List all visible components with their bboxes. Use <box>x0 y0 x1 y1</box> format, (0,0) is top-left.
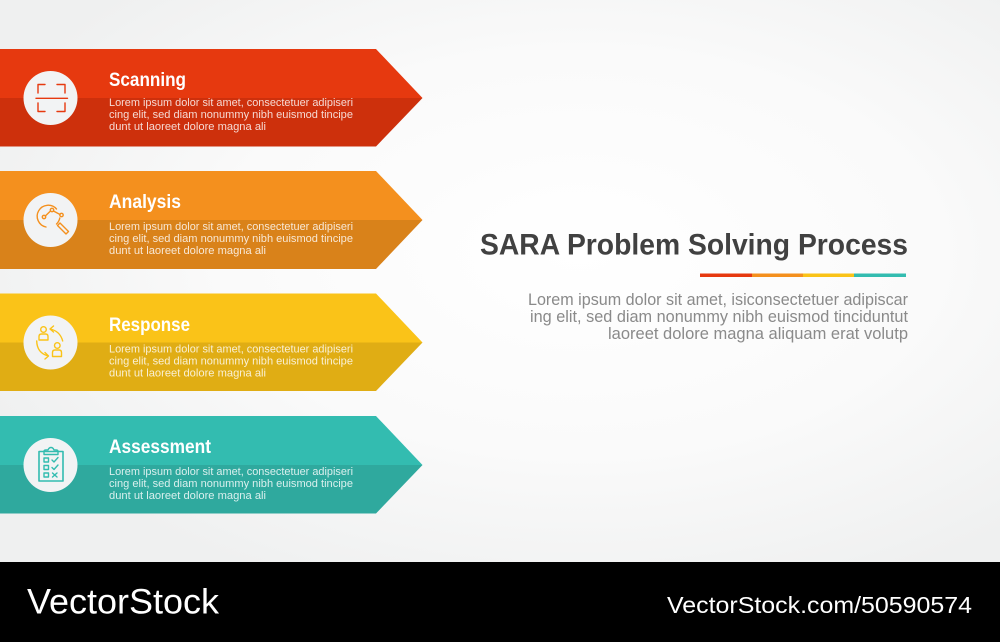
text block: Analysis <box>109 221 353 257</box>
footer logo: VectorStock <box>27 582 219 622</box>
icon: people exchange <box>24 316 78 370</box>
heading: Assessment: Assessment <box>109 436 211 458</box>
colour divider <box>700 274 906 277</box>
text block: Assessment <box>109 466 353 502</box>
panel: Scanning <box>0 49 422 146</box>
text block: Analysis: Lorem ipsum dolor sit amet, consectetuer adipiseri <box>109 221 353 233</box>
arrow band: Assessment <box>0 416 422 514</box>
footer image id: VectorStock.com/50590574 <box>667 592 972 618</box>
title: SARA Problem Solving Process <box>480 228 908 262</box>
panel: Assessment <box>0 416 422 514</box>
footer bar <box>0 562 1000 642</box>
arrow band: Response <box>0 294 422 391</box>
text block: Analysis: cing elit, sed diam nonummy nibh euismod tincipe <box>109 233 353 245</box>
text block: Analysis: dunt ut laoreet dolore magna ali <box>109 245 266 257</box>
description text <box>528 291 908 343</box>
icon: scan frame <box>24 71 78 125</box>
description text: laoreet dolore magna aliquam erat volutp <box>608 325 908 343</box>
text block: Scanning: cing elit, sed diam nonummy nibh euismod tincipe <box>109 109 353 121</box>
arrow band: Analysis <box>0 171 422 269</box>
text block: Assessment: dunt ut laoreet dolore magna ali <box>109 490 266 502</box>
text block: Response <box>109 344 353 380</box>
heading: Response: Response <box>109 314 190 336</box>
text block: Scanning: Lorem ipsum dolor sit amet, consectetuer adipiseri <box>109 97 353 109</box>
icon: checklist clipboard <box>24 438 78 492</box>
text block: Scanning <box>109 97 353 133</box>
text block: Assessment: cing elit, sed diam nonummy nibh euismod tincipe <box>109 478 353 490</box>
text block: Assessment: Lorem ipsum dolor sit amet, consectetuer adipiseri <box>109 466 353 478</box>
text block: Response: cing elit, sed diam nonummy nibh euismod tincipe <box>109 356 353 368</box>
icon: magnifier with nodes <box>24 193 78 247</box>
description text: Lorem ipsum dolor sit amet, isiconsectetuer adipiscar <box>528 291 908 309</box>
text block: Response: dunt ut laoreet dolore magna ali <box>109 368 266 380</box>
text block: Scanning: dunt ut laoreet dolore magna ali <box>109 121 266 133</box>
heading: Scanning: Scanning <box>109 69 186 91</box>
arrow band: Scanning <box>0 49 422 146</box>
heading: Analysis: Analysis <box>109 191 181 213</box>
description text: ing elit, sed diam nonummy nibh euismod tinciduntut <box>530 308 908 326</box>
text block: Response: Lorem ipsum dolor sit amet, consectetuer adipiseri <box>109 344 353 356</box>
panel: Analysis <box>0 171 422 269</box>
panel: Response <box>0 294 422 391</box>
